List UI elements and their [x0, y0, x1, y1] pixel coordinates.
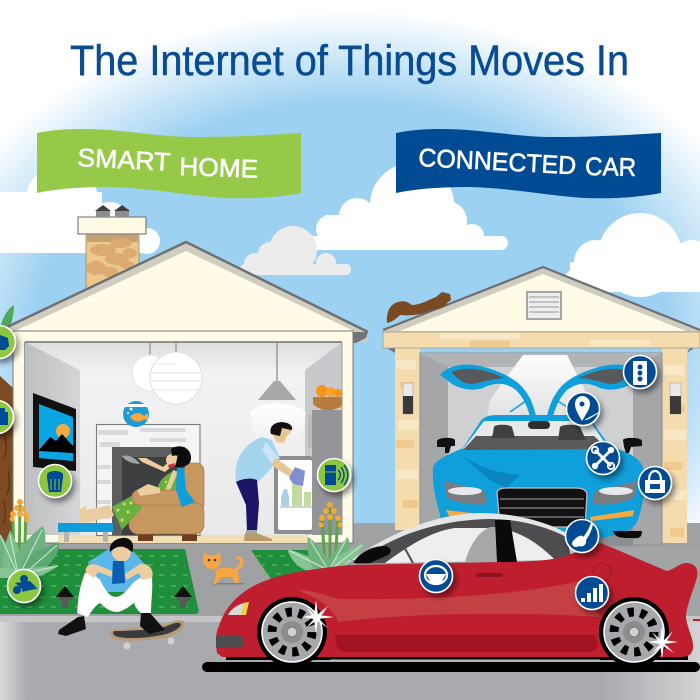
- banner: smart home: [37, 129, 301, 198]
- clouds: [0, 163, 700, 297]
- roof and windows: [344, 513, 580, 566]
- banner: connected car: CAR: [585, 153, 636, 182]
- icon: blue signal bars: [576, 576, 608, 610]
- fridge and fruit bowl: [274, 385, 342, 535]
- boy on skateboard: [58, 538, 185, 650]
- blue car: [433, 364, 645, 538]
- red car: [202, 513, 700, 672]
- house: [5, 205, 368, 543]
- ground shadow: [202, 662, 700, 672]
- chimney: [78, 205, 146, 290]
- ceiling lamp: [250, 343, 306, 445]
- gable: [383, 267, 700, 338]
- lower sill: [335, 635, 598, 652]
- floor: [58, 535, 308, 543]
- banner: smart home: SMART: [77, 144, 171, 177]
- icon: green smart lock: [0, 326, 16, 358]
- icon: green trash can: [38, 464, 72, 498]
- ground and road: [0, 523, 700, 700]
- garden lights: [56, 586, 192, 608]
- man at fridge: [235, 422, 305, 541]
- armchair: [129, 463, 204, 541]
- skateboard: [110, 620, 185, 650]
- lawn left: [0, 549, 199, 614]
- fishbowl: [123, 401, 149, 427]
- tree: [0, 305, 14, 545]
- front wheel: [257, 597, 327, 667]
- icon: blue steering wheel: [420, 560, 452, 592]
- lawn right: [251, 550, 310, 582]
- woman in armchair: [58, 446, 204, 542]
- gull wing doors: [440, 364, 643, 420]
- icon: green appliance: [0, 400, 14, 434]
- icon: green connected fridge: [318, 458, 350, 492]
- plant right: [287, 502, 365, 572]
- roof beam and posts: [383, 332, 700, 543]
- squirrel: [387, 292, 451, 323]
- headlights: [444, 481, 637, 505]
- icon: blue map pin: [566, 392, 600, 426]
- wall lamps: [403, 383, 681, 414]
- title: The Internet of Things Moves In: [70, 37, 629, 85]
- garage interior: [420, 353, 662, 546]
- icon: blue wrenches: [586, 442, 620, 474]
- wall picture: [33, 393, 76, 471]
- fireplace: [96, 424, 200, 536]
- banner: connected car: CONNECTED: [418, 144, 577, 180]
- rear wheel: [599, 597, 669, 667]
- vent: [527, 292, 561, 319]
- icon: green wheelbarrow: [8, 570, 40, 602]
- room interior: [24, 342, 342, 535]
- roof and gable: [5, 242, 368, 343]
- body: [216, 543, 697, 657]
- garage: [383, 267, 700, 546]
- ottoman: [58, 523, 113, 542]
- plant left: [0, 499, 59, 579]
- icon: blue security lock: [638, 466, 672, 500]
- icon: blue traffic light: [624, 356, 656, 388]
- banner: connected car: [396, 129, 661, 198]
- icon: blue guitar: [566, 520, 598, 552]
- grille: [497, 488, 587, 527]
- pendant lanterns: [132, 343, 202, 404]
- sparkles: [302, 600, 678, 659]
- door handle and fuel cap: [476, 563, 611, 581]
- banner: smart home: HOME: [179, 153, 259, 184]
- highlight band: [296, 580, 600, 622]
- cat: [203, 552, 244, 584]
